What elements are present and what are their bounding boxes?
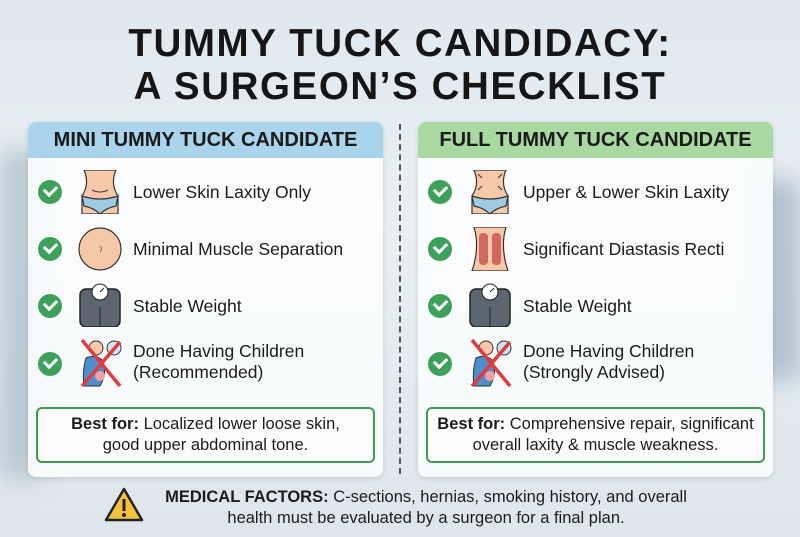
best for: mini bbox=[36, 407, 375, 463]
row: stable weight bbox=[38, 284, 242, 327]
medical factors note: health must be evaluated by a surgeon for a final plan. bbox=[227, 509, 625, 527]
row: lower skin laxity bbox=[38, 170, 311, 214]
row: diastasis recti: Significant Diastasis Recti bbox=[523, 239, 724, 259]
best for: full bbox=[426, 407, 765, 463]
row: stable weight: Stable Weight bbox=[523, 296, 632, 316]
row: stable weight bbox=[428, 284, 632, 327]
row: diastasis recti bbox=[428, 227, 724, 271]
row: minimal muscle separation bbox=[38, 227, 343, 271]
row: upper and lower skin laxity: Upper & Lower Skin Laxity bbox=[523, 182, 729, 202]
panel: mini tummy tuck bbox=[28, 122, 383, 477]
best for: mini: good upper abdominal tone. bbox=[103, 436, 308, 454]
best for: full: Best for: Comprehensive repair, significant bbox=[437, 415, 754, 433]
row: done having children bbox=[38, 338, 304, 388]
row: minimal muscle separation: Minimal Muscle Separation bbox=[133, 239, 343, 259]
row: done having children: (Recommended) bbox=[133, 362, 263, 382]
title bbox=[128, 22, 672, 108]
best for: mini: Best for: Localized lower loose skin, bbox=[71, 415, 340, 433]
medical factors note bbox=[165, 488, 687, 527]
medical factors note: MEDICAL FACTORS: C-sections, hernias, smoking history, and overall bbox=[165, 488, 687, 506]
divider bbox=[399, 124, 401, 474]
title: TUMMY TUCK CANDIDACY: bbox=[128, 22, 672, 65]
best for: full: overall laxity & muscle weakness. bbox=[473, 436, 718, 454]
title: A SURGEON’S CHECKLIST bbox=[134, 65, 666, 108]
row: upper and lower skin laxity bbox=[428, 170, 730, 214]
row: done having children: Done Having Children bbox=[523, 341, 694, 361]
row: done having children: Done Having Children bbox=[133, 341, 304, 361]
header: full bbox=[418, 122, 773, 158]
row: done having children: (Strongly Advised) bbox=[523, 362, 665, 382]
icon: warning bbox=[104, 488, 144, 522]
row: lower skin laxity: Lower Skin Laxity Only bbox=[133, 182, 311, 202]
header: mini bbox=[28, 122, 383, 158]
header: mini: MINI TUMMY TUCK CANDIDATE bbox=[54, 129, 357, 151]
row: done having children bbox=[428, 338, 694, 388]
row: stable weight: Stable Weight bbox=[133, 296, 242, 316]
panel: full tummy tuck bbox=[418, 122, 773, 477]
header: full: FULL TUMMY TUCK CANDIDATE bbox=[439, 129, 752, 151]
